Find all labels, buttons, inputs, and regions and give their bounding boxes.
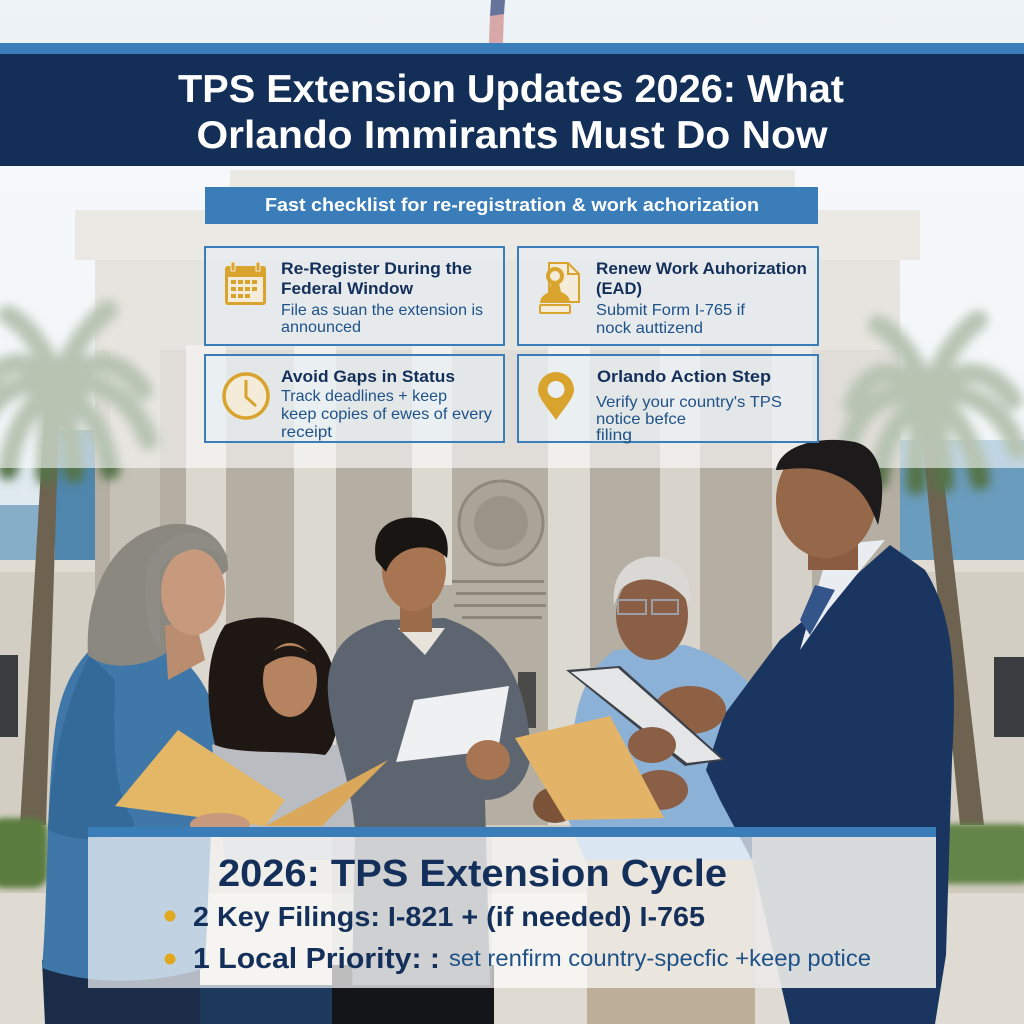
heading: Renew Work Auhorization [596,259,807,278]
bullet [164,954,176,964]
title banner [0,43,1024,166]
body text: Verify your country's TPS [596,394,782,411]
panel: orlando action step [518,355,818,444]
heading: 2026: TPS Extension Cycle [218,853,727,895]
heading line 2: Federal Window [281,279,414,298]
bullet detail: set renfirm country-specfic +keep potice [449,945,871,971]
icon: clock [224,374,268,418]
person: young man [328,517,531,1024]
panel: 2026 extension cycle [88,827,936,988]
body text line 2: nock auttizend [596,320,703,337]
bullet text: 1 Local Priority: : [193,943,440,975]
icon: map pin [538,372,574,420]
body text: File as suan the extension is [281,302,483,319]
body text line 2: announced [281,319,361,336]
icon: document and stamp [540,263,579,313]
person: girl [200,618,356,1024]
panel: renew work authorization [518,247,818,345]
palm tree left [0,310,148,825]
title text: TPS Extension Updates 2026: What [178,68,844,111]
person: woman in denim shirt [42,524,228,1024]
clipboard [566,666,725,766]
subtitle band [205,187,818,224]
heading: Orlando Action Step [597,367,771,386]
group of people [42,440,954,1024]
body text: Submit Form I-765 if [596,302,746,319]
title text line 2: Orlando Immirants Must Do Now [196,114,828,157]
bullet [164,910,176,922]
ground and hedges [0,818,1024,1024]
heading line 2: (EAD) [596,279,642,298]
heading: Re-Register During the [281,259,472,278]
icon: calendar [225,262,266,305]
person: man in navy suit [654,440,954,1024]
body text line 2: notice befce [596,411,686,428]
hand of young man [466,740,510,780]
haze overlay over upper photo [0,166,1024,468]
heading: Avoid Gaps in Status [281,367,455,386]
subtitle band: Fast checklist for re-registration & work achorization [265,194,759,215]
panel: re-register [205,247,504,345]
panel: avoid gaps [205,355,504,442]
body text line 3: receipt [281,424,333,441]
seal on the facade [459,481,543,565]
body text: Track deadlines + keep [281,388,447,405]
body text line 2: keep copies of ewes of every [281,406,492,423]
bullet text: 2 Key Filings: I-821 + (if needed) I-765 [193,901,705,932]
palm tree right [848,320,1018,825]
folder held by woman [115,730,388,837]
hands on clipboard [628,727,676,763]
flag [489,0,505,43]
paper held by young man [396,686,509,762]
body text line 3: filing [596,427,632,444]
person: older man [533,557,765,1024]
engraved plaque [452,580,546,619]
folder held by older man [515,716,664,820]
